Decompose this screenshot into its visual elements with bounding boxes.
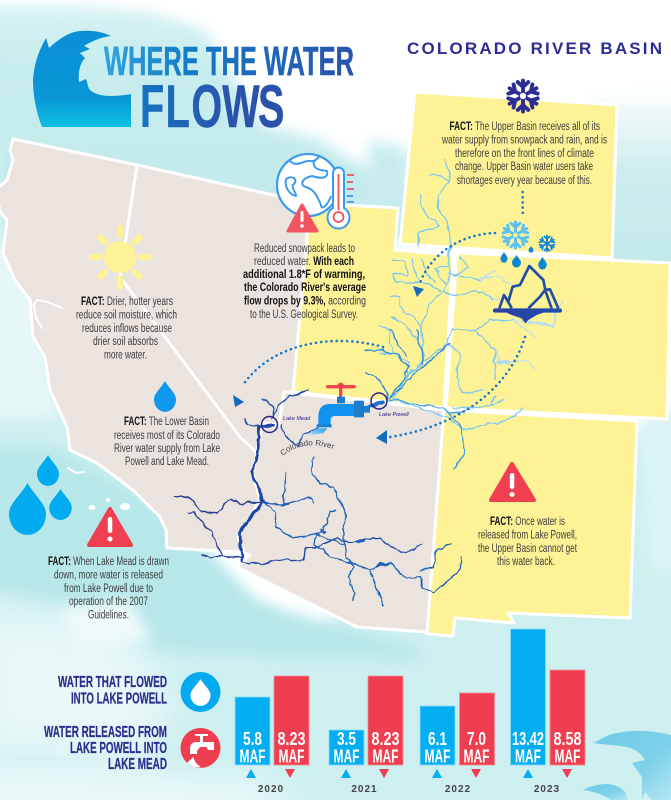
icon: navy snowflake bbox=[507, 80, 539, 112]
label: Colorado River: Colorado River bbox=[280, 440, 335, 455]
2023 bars: 8.58 bbox=[554, 729, 582, 749]
text: lower basin fact: FACT: The Lower Basin bbox=[124, 416, 209, 428]
text: lower basin fact: River water supply from Lake bbox=[114, 443, 220, 455]
text: Lake Mead fact: Guidelines. bbox=[88, 610, 129, 622]
rivers: lower basin bbox=[173, 330, 470, 606]
state: Colorado bbox=[446, 253, 670, 419]
text: once released fact: this water back. bbox=[497, 556, 555, 568]
curve for the river label bbox=[283, 445, 350, 458]
rivers: upper basin bbox=[378, 160, 562, 430]
title with wave logo bbox=[33, 31, 354, 140]
2023 bars: 13.42 bbox=[512, 729, 544, 749]
2020 bars: MAF bbox=[278, 746, 304, 766]
2021 bars: 8.23 bbox=[372, 729, 400, 749]
text: soil moisture fact: reduces inflows because bbox=[82, 323, 172, 335]
icon: lower basin water drop bbox=[154, 381, 176, 412]
arrowhead: to Arizona bbox=[376, 430, 387, 444]
text: soil moisture fact: reduce soil moisture, which bbox=[76, 310, 177, 322]
2022 bars: 2022 bbox=[445, 784, 471, 795]
map of the basin states bbox=[0, 92, 670, 636]
label: Lake Powell: Lake Powell bbox=[379, 412, 409, 418]
text: once released fact bbox=[478, 516, 578, 568]
legend: INTO LAKE POWELL bbox=[71, 690, 167, 708]
2022 bars bbox=[420, 693, 494, 795]
icon: snow and drops bbox=[500, 222, 555, 270]
arrowhead: to upper basin rivers bbox=[413, 286, 424, 297]
2020 bars: MAF bbox=[240, 746, 266, 766]
text: climate statement: to the U.S. Geological Survey. bbox=[250, 309, 358, 321]
icon: warning triangle upper basin bbox=[491, 464, 534, 500]
text: climate statement: reduced water. With each bbox=[254, 256, 354, 268]
2021 bars: 2021 bbox=[351, 784, 378, 795]
2021 bars: 3.5 bbox=[337, 729, 356, 749]
text: upper basin fact: FACT: The Upper Basin receives all of its bbox=[450, 121, 600, 133]
state: California and Nevada bbox=[0, 139, 310, 553]
text: Lake Mead fact: down, more water is released bbox=[54, 570, 163, 582]
text: climate statement: Reduced snowpack leads to bbox=[254, 243, 355, 255]
text: climate statement: flow drops by 9.3%, according bbox=[244, 296, 366, 308]
text: once released fact: released from Lake Powell, bbox=[478, 530, 577, 542]
2022 bars: MAF bbox=[464, 746, 490, 766]
state: New Mexico bbox=[427, 410, 637, 636]
2021 bars: MAF bbox=[372, 746, 398, 766]
2022 bars: 7.0 bbox=[467, 729, 486, 749]
text: upper basin fact bbox=[441, 121, 607, 187]
bar chart bbox=[235, 629, 585, 795]
2023 bars: MAF bbox=[554, 746, 580, 766]
state: Wyoming bbox=[400, 92, 617, 258]
text: soil moisture fact: more water. bbox=[104, 350, 147, 362]
text: lower basin fact: receives most of its Colorado bbox=[114, 430, 220, 442]
text: once released fact: FACT: Once water is bbox=[490, 516, 565, 528]
text: Lake Mead fact: operation of the 2007 bbox=[69, 596, 148, 608]
legend icon: release bbox=[180, 728, 220, 768]
icon: globe with thermometer and warning bbox=[277, 154, 354, 231]
icon: corner waves bbox=[583, 731, 671, 800]
text: climate statement: the Colorado River's average bbox=[244, 282, 366, 294]
text: lower basin fact: Powell and Lake Mead. bbox=[125, 456, 209, 468]
text: upper basin fact: therefore on the front lines of climate bbox=[455, 148, 594, 160]
legend: LAKE MEAD bbox=[108, 756, 167, 773]
legend: LAKE POWELL INTO bbox=[70, 740, 167, 757]
legend text: inflow: WATER THAT FLOWED bbox=[58, 674, 167, 691]
icon: wave bbox=[33, 31, 131, 127]
2023 bars bbox=[510, 629, 585, 795]
icon: faucet bbox=[307, 383, 370, 435]
text: climate statement bbox=[243, 243, 366, 321]
label: Lake Mead: Lake Mead bbox=[283, 416, 311, 422]
2023 bars: MAF bbox=[515, 746, 541, 766]
icon: mountain bbox=[493, 266, 562, 323]
text: upper basin fact: shortages every year because of this. bbox=[457, 175, 592, 187]
icon: sun bbox=[92, 228, 148, 286]
text: once released fact: the Upper Basin cannot get bbox=[478, 543, 578, 555]
text: climate statement: additional 1.8*F of warming, bbox=[243, 269, 365, 281]
2020 bars bbox=[235, 676, 309, 795]
text: upper basin fact: water supply from snowpack and rain, and is bbox=[441, 134, 607, 146]
2020 bars: 2020 bbox=[258, 784, 284, 795]
legend bbox=[44, 672, 220, 773]
text: Lake Mead fact bbox=[48, 556, 169, 622]
2020 bars: 8.23 bbox=[278, 729, 306, 749]
arrowhead: to lower basin bbox=[233, 395, 244, 407]
text: soil moisture fact: FACT: Drier, hotter years bbox=[81, 296, 173, 308]
subtitle: COLORADO RIVER BASIN bbox=[407, 39, 662, 58]
heading line one: WHERE THE WATER bbox=[104, 38, 354, 84]
text: Lake Mead fact: from Lake Powell due to bbox=[64, 583, 153, 595]
state: Utah bbox=[293, 203, 453, 408]
lake circle markers bbox=[262, 393, 387, 432]
legend icon: inflow bbox=[180, 672, 220, 712]
heading line two: FLOWS bbox=[140, 73, 284, 140]
legend text: release: WATER RELEASED FROM bbox=[44, 724, 167, 741]
text: soil moisture fact bbox=[76, 296, 177, 362]
2022 bars: 6.1 bbox=[428, 729, 447, 749]
text: soil moisture fact: drier soil absorbs bbox=[93, 336, 158, 348]
2021 bars: MAF bbox=[334, 746, 360, 766]
text: Lake Mead fact: FACT: When Lake Mead is drawn bbox=[48, 556, 169, 568]
2021 bars bbox=[329, 676, 403, 795]
icon: water drops bbox=[9, 455, 72, 535]
text: lower basin fact bbox=[114, 416, 220, 468]
icon: warning triangle Lake Mead bbox=[89, 509, 131, 545]
state: Arizona bbox=[237, 392, 444, 632]
2023 bars: 2023 bbox=[534, 784, 560, 795]
2020 bars: 5.8 bbox=[243, 729, 262, 749]
2022 bars: MAF bbox=[424, 746, 450, 766]
text: upper basin fact: change. Upper Basin water users take bbox=[455, 161, 593, 173]
arrows: dotted flow paths bbox=[243, 192, 525, 437]
